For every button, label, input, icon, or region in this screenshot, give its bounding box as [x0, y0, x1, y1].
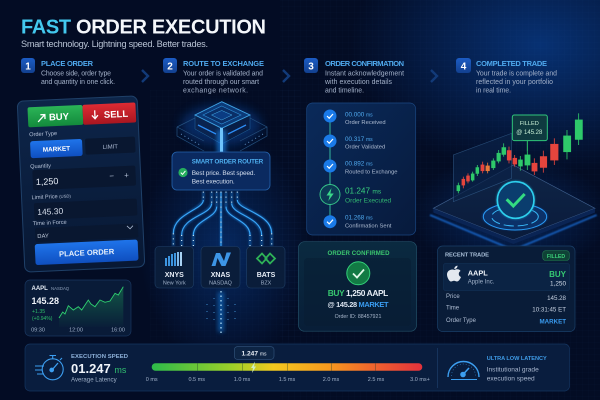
panel: order ticket [17, 96, 145, 272]
latency gauge bar [146, 347, 430, 383]
panel: execution speed bar: EXECUTION SPEED [71, 354, 128, 360]
panel: AAPL mini chart: 16:00 [111, 328, 125, 334]
icon: green check [178, 168, 188, 177]
step 4: completed trade: Your trade is complete and [476, 70, 557, 78]
step 4: completed trade: reflected in your portfolio [476, 79, 553, 86]
panel: recent trade: 1,250 [550, 280, 566, 288]
step: order executed: Order Executed [345, 198, 392, 204]
panel: execution speed bar: execution speed [487, 376, 535, 382]
latency gauge bar: 2.5 ms [368, 377, 384, 383]
quantity: Quantity [30, 163, 51, 170]
panel: execution speed bar: 01.247 ms [71, 361, 127, 376]
panel: order confirmed: Order ID: 88457921 [335, 314, 381, 320]
callout: filled: FILLED [520, 121, 539, 127]
limit price: 145.30 [37, 206, 64, 217]
panel: AAPL mini chart: (+0.94%) [32, 316, 53, 322]
step: order received: Order Received [345, 120, 386, 126]
panel: smart order router: Best price. Best speed. [192, 170, 255, 177]
lower layer [177, 118, 267, 151]
quantity: + [124, 171, 130, 180]
panel: order confirmed: @ 145.28 MARKET [328, 300, 389, 309]
icon: stopwatch [35, 356, 63, 380]
order type [29, 128, 136, 158]
panel: recent trade [438, 246, 575, 332]
panel: recent trade: RECENT TRADE [445, 252, 489, 258]
icon: success check [496, 180, 536, 220]
order type: Order Type [29, 131, 57, 138]
step: confirmation sent [324, 214, 392, 230]
panel: order confirmed: ORDER CONFIRMED [328, 250, 390, 257]
step: order validated: Order Validated [345, 144, 385, 150]
icon: speedometer [448, 362, 479, 380]
step 1: place order: and quantity in one click. [41, 79, 115, 86]
latency gauge bar: 3.0 ms+ [410, 377, 430, 383]
limit price: Limit Price (USD) [31, 193, 72, 201]
title: FAST ORDER EXECUTION [21, 16, 266, 38]
panel: recent trade: Order Type [446, 318, 477, 324]
exchange: XNAS: XNAS [211, 272, 231, 279]
data stream below exchanges [207, 291, 235, 334]
panel: smart order router: SMART ORDER ROUTER [192, 158, 264, 166]
latency gauge bar: 0 ms [146, 377, 158, 383]
chart backdrop [453, 133, 512, 202]
buy button [27, 105, 83, 127]
callout: filled: @ 145.28 [516, 130, 543, 136]
panel: AAPL mini chart [25, 280, 131, 336]
step 4: completed trade [456, 58, 557, 94]
order type: LIMIT [103, 144, 119, 151]
arrow: step 2 to 3 [283, 70, 289, 82]
exchange: BATS: BZX [261, 280, 272, 286]
step: order received: 00.000 ms [345, 112, 373, 118]
panel: order confirmed [298, 242, 416, 331]
panel: AAPL mini chart: 12:00 [69, 328, 83, 334]
candlesticks [457, 113, 582, 193]
step: order received [324, 110, 386, 126]
panel: recent trade: MARKET [540, 318, 566, 326]
step 3: order confirmation [304, 58, 404, 94]
filled badge: FILLED [547, 254, 565, 260]
step: order validated [324, 134, 385, 150]
exchange: XNYS: New York [163, 280, 186, 286]
step: order executed [320, 184, 392, 204]
step 2: route to exchange: Your order is validated and [183, 70, 263, 78]
panel: recent trade: Apple Inc. [468, 280, 495, 286]
step 3: order confirmation: Instant acknowledgement [325, 70, 404, 78]
icon: bars [165, 252, 182, 266]
step: order executed: 01.247 ms [345, 186, 382, 196]
step 4: completed trade: 4 [461, 62, 467, 72]
step 2: route to exchange: ROUTE TO EXCHANGE [183, 59, 264, 68]
tooltip: 1.247 ms [241, 350, 267, 358]
quantity: − [109, 171, 115, 181]
time in force: DAY [37, 234, 49, 240]
exchange: XNAS [201, 246, 240, 288]
arrow: step 1 to 2 [142, 70, 148, 82]
step: order validated: 00.317 ms [345, 136, 373, 143]
routing lines [173, 192, 272, 246]
panel: execution speed bar: Institutional grade [487, 366, 539, 374]
step 3: order confirmation: ORDER CONFIRMATION [325, 59, 404, 68]
step: confirmation sent: 01.268 ms [345, 214, 373, 222]
subtitle: Smart technology. Lightning speed. Better trades. [21, 39, 208, 49]
panel: smart order router [172, 152, 270, 190]
server stack illustration [177, 102, 267, 154]
step: routed to exchange [324, 160, 398, 176]
icon: apple logo [447, 266, 461, 282]
panel: execution timeline [307, 103, 416, 235]
panel: smart order router: Best execution. [192, 178, 235, 186]
step 4: completed trade: COMPLETED TRADE [476, 59, 547, 68]
limit price [31, 190, 137, 220]
order type: MARKET [43, 145, 70, 154]
sell button: SELL [104, 109, 129, 121]
quantity [30, 160, 136, 190]
step 2: route to exchange: routed through our smart [183, 79, 259, 86]
step 2: route to exchange: exchange network. [183, 88, 248, 94]
panel: AAPL mini chart: NASDAQ [51, 286, 70, 291]
step 1: place order [21, 58, 115, 86]
panel: execution speed bar: Average Latency [71, 376, 118, 384]
cube [195, 115, 222, 144]
panel: recent trade: AAPL [468, 268, 488, 278]
panel: order confirmed: BUY 1,250 AAPL [328, 288, 388, 298]
panel: recent trade: 145.28 [547, 295, 567, 302]
panel: recent trade: Time [446, 306, 460, 312]
step 1: place order: Choose side, order type [41, 70, 111, 78]
step 2: route to exchange [163, 58, 264, 94]
panel: AAPL mini chart: +1.35 [32, 309, 45, 315]
step 1: place order: PLACE ORDER [41, 59, 94, 68]
exchange: XNAS: NASDAQ [209, 280, 232, 286]
panel: AAPL mini chart: 09:30 [31, 328, 45, 334]
time in force: Time in Force [33, 220, 67, 227]
latency gauge bar: 2.0 ms [323, 377, 339, 383]
panel: AAPL mini chart: AAPL [32, 286, 48, 292]
step 2: route to exchange: 2 [167, 62, 173, 72]
exchange: XNYS: XNYS [165, 272, 184, 279]
tooltip [234, 347, 274, 359]
panel: recent trade: 10:31:45 ET [532, 306, 566, 314]
line chart [59, 287, 123, 327]
icon: confirmation check [347, 262, 370, 285]
step: routed to exchange: 00.892 ms [345, 160, 373, 168]
exchange: BATS: BATS [257, 272, 276, 279]
completed trade illustration [430, 113, 597, 250]
step 3: order confirmation: with execution details [324, 79, 393, 86]
icon: N logo [212, 252, 231, 266]
quantity: 1,250 [36, 176, 59, 187]
panel: recent trade: Price [446, 294, 460, 300]
step: routed to exchange: Routed to Exchange [345, 170, 398, 176]
callout: filled [512, 115, 547, 152]
exchange: XNYS [155, 246, 194, 288]
arrow: step 3 to 4 [431, 70, 437, 82]
step 1: place order: 1 [25, 62, 31, 72]
glowing rings [482, 203, 548, 231]
step 4: completed trade: in real time. [476, 88, 511, 94]
icon: diamonds [257, 254, 275, 264]
panel: AAPL mini chart: 145.28 [32, 296, 59, 306]
step 3: order confirmation: 3 [308, 62, 314, 72]
latency gauge bar: 0.5 ms [188, 377, 205, 383]
step 3: order confirmation: and timeline. [325, 88, 364, 94]
exchange: BATS [247, 246, 285, 288]
sell button [82, 102, 136, 125]
step: confirmation sent: Confirmation Sent [345, 224, 392, 230]
place order button: PLACE ORDER [59, 247, 115, 259]
panel: execution speed bar: ULTRA LOW LATENCY [487, 356, 547, 362]
latency gauge bar: 1.0 ms [234, 377, 250, 383]
time in force [33, 216, 138, 242]
platform [430, 165, 597, 250]
place order button [35, 239, 139, 265]
latency gauge bar: 1.5 ms [279, 377, 295, 383]
panel: execution speed bar [25, 344, 570, 391]
buy button: BUY [49, 111, 70, 123]
panel: recent trade: BUY [549, 270, 567, 279]
marker bolt [251, 362, 256, 373]
